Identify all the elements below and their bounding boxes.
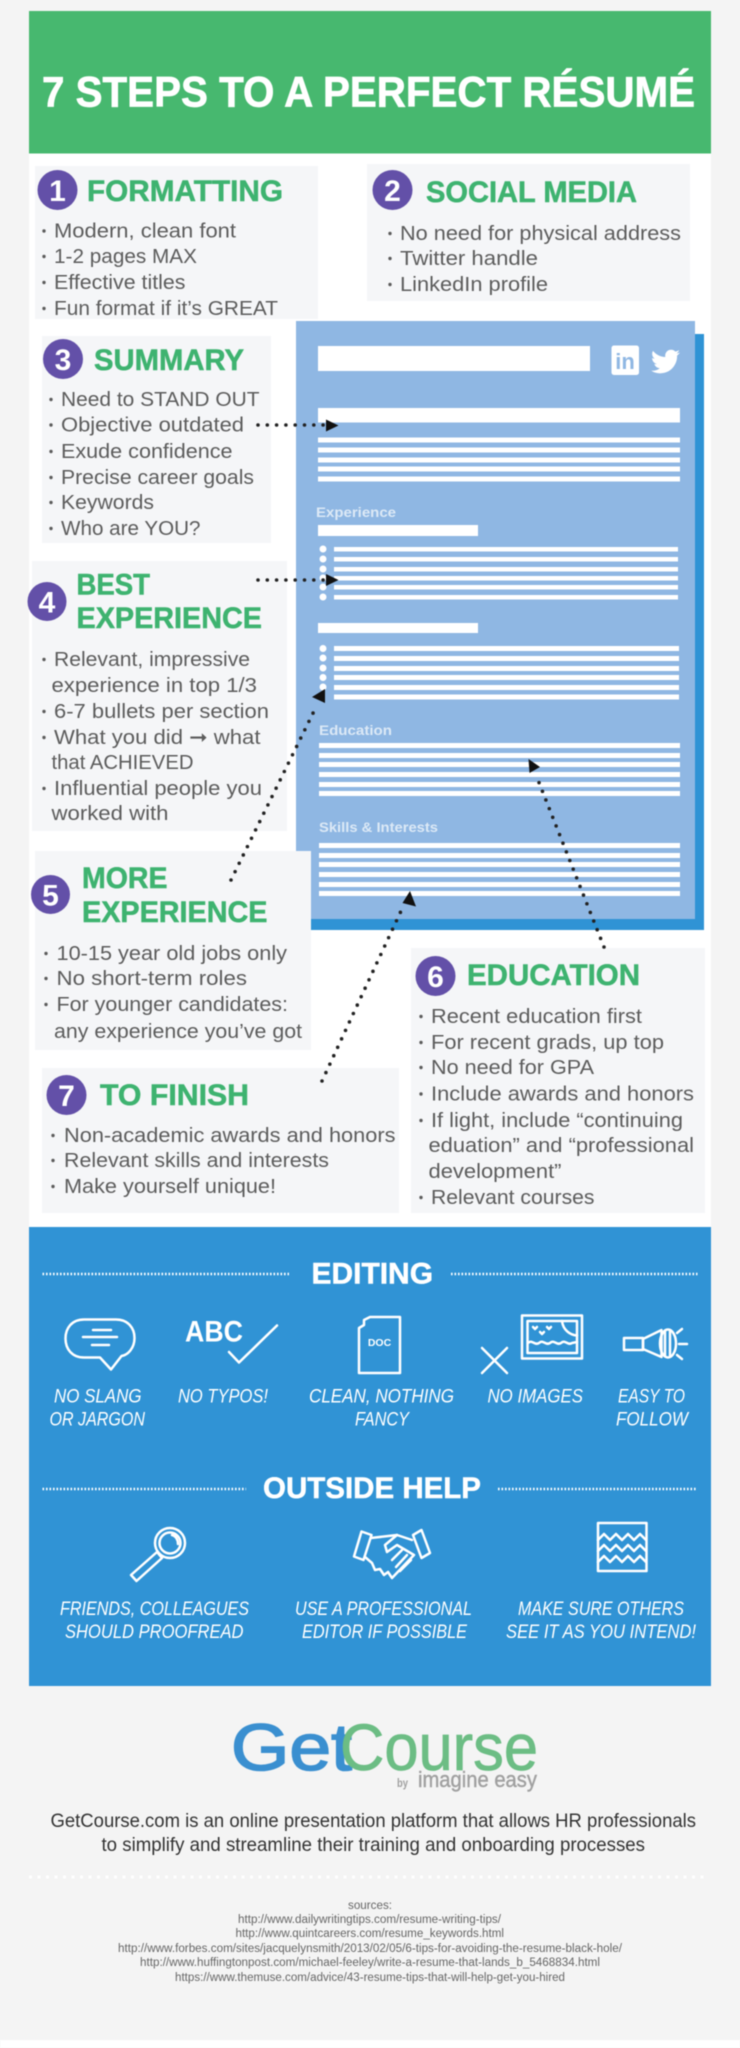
number badge 6 (416, 956, 456, 996)
caption: make sure others: SEE IT AS YOU INTEND! (506, 1621, 696, 1643)
panel: editing and outside help (29, 1227, 711, 1686)
list: summary: Who are YOU? (61, 517, 200, 540)
heading: editing: EDITING (312, 1258, 433, 1290)
icon: twitter (651, 350, 680, 373)
list: summary: Need to STAND OUT (61, 388, 260, 411)
list: best experience (42, 648, 269, 825)
logo: getcourse (231, 1710, 538, 1792)
list: summary (49, 388, 260, 540)
label: experience: Experience (316, 504, 396, 520)
icon: framed image (522, 1316, 582, 1358)
number badge 7: 7 (58, 1080, 75, 1113)
sources (118, 1900, 623, 1984)
list: education: Relevant courses (431, 1186, 594, 1209)
caption: easy to follow: FOLLOW (616, 1408, 689, 1430)
caption: no typos: NO TYPOS! (178, 1386, 268, 1408)
icon: abc check: ABC (185, 1316, 243, 1348)
list: education: Recent education first (431, 1005, 642, 1028)
resume illustration (296, 321, 704, 930)
caption: easy to follow (616, 1386, 689, 1430)
list: summary: Precise career goals (61, 466, 254, 489)
sources: http://www.huffingtonpost.com/michael-feeley/write-a-resume-that-lands_b_5468834.html (140, 1957, 600, 1969)
icon: doc file (359, 1317, 400, 1373)
panel: 2 social media (367, 164, 690, 301)
panel: 3 summary (42, 336, 271, 543)
description text (50, 1810, 696, 1856)
arrow: more experience to resume (231, 689, 325, 880)
number badge 3: 3 (55, 344, 71, 377)
list: summary: Keywords (61, 491, 154, 514)
list: more experience: No short-term roles (56, 967, 247, 990)
title banner (29, 11, 711, 154)
label: education: Education (319, 722, 392, 738)
heading: best experience: EXPERIENCE (76, 602, 262, 635)
panel: 6 education (411, 948, 705, 1213)
icon: handshake (354, 1530, 430, 1578)
sources: http://www.forbes.com/sites/jacquelynsmith/2013/02/05/6-tips-for-avoiding-the-resume-black-hole/ (118, 1943, 623, 1955)
number badge 1 (38, 170, 78, 210)
number badge 6: 6 (427, 961, 444, 994)
icon: speech bubble (66, 1320, 134, 1370)
number badge 5: 5 (42, 880, 59, 912)
heading: social media: SOCIAL MEDIA (426, 176, 637, 209)
list: to finish: Make yourself unique! (64, 1175, 276, 1198)
caption: clean nothing fancy (309, 1386, 454, 1430)
number badge 3 (43, 339, 83, 379)
list: formatting: Fun format if it’s GREAT (54, 297, 278, 320)
list: summary: Exude confidence (61, 440, 232, 463)
list: social media (388, 222, 681, 296)
sources: http://www.quintcareers.com/resume_keywords.html (236, 1928, 504, 1940)
logo: getcourse: Get (231, 1710, 352, 1784)
list: social media: Twitter handle (400, 247, 538, 270)
list: to finish: Non-academic awards and honors (64, 1124, 396, 1147)
list: best experience: Relevant, impressive (54, 648, 250, 671)
list: education (419, 1005, 694, 1209)
heading: to finish: TO FINISH (100, 1079, 249, 1112)
number badge 5 (31, 875, 70, 914)
caption: professional editor: EDITOR IF POSSIBLE (302, 1621, 468, 1643)
list: to finish: Relevant skills and interests (64, 1149, 329, 1172)
caption: friends colleagues: FRIENDS, COLLEAGUES (60, 1598, 249, 1620)
list: education: No need for GPA (431, 1056, 594, 1079)
heading: outside help: OUTSIDE HELP (263, 1472, 481, 1505)
heading: best experience (76, 568, 262, 635)
caption: easy to follow: EASY TO (618, 1386, 685, 1408)
caption: clean nothing fancy: FANCY (355, 1408, 411, 1430)
caption: make sure others (506, 1598, 696, 1643)
arrow: best experience to resume (258, 574, 338, 586)
icon: zigzag document (598, 1523, 646, 1571)
panel: 7 to finish (42, 1068, 399, 1213)
icon: linkedin (612, 346, 639, 375)
list: education: eduation” and “professional (428, 1134, 694, 1157)
list: formatting: 1-2 pages MAX (54, 245, 197, 268)
caption: clean nothing fancy: CLEAN, NOTHING (309, 1386, 454, 1408)
caption: professional editor (295, 1598, 472, 1643)
list: more experience: 10-15 year old jobs only (56, 942, 288, 965)
list: to finish (51, 1124, 396, 1198)
number badge 4 (28, 582, 66, 621)
title banner: 7 STEPS TO A PERFECT RÉSUMÉ (42, 68, 695, 116)
heading: education: EDUCATION (467, 959, 640, 992)
sources: sources: (348, 1900, 392, 1912)
heading: more experience: MORE (82, 862, 168, 895)
list: best experience: 6-7 bullets per section (54, 700, 269, 723)
sources: https://www.themuse.com/advice/43-resume-tips-that-will-help-get-you-hired (175, 1972, 565, 1984)
caption: no slang: OR JARGON (50, 1408, 146, 1430)
panel: 4 best experience (28, 561, 287, 831)
arrow: to finish to resume (322, 891, 416, 1081)
icon: flashlight (624, 1329, 687, 1359)
number badge 1: 1 (49, 175, 66, 208)
list: best experience: experience in top 1/3 (52, 674, 257, 697)
caption: no images: NO IMAGES (488, 1386, 583, 1408)
list: social media: No need for physical address (400, 222, 681, 245)
heading: best experience: BEST (76, 568, 150, 602)
number badge 2: 2 (384, 175, 401, 208)
heading: summary: SUMMARY (94, 344, 244, 377)
arrow: education to resume (528, 759, 604, 947)
list: more experience: any experience you’ve got (54, 1020, 302, 1043)
list: best experience: What you did ➞ what (54, 726, 261, 749)
panel: 5 more experience (31, 851, 311, 1050)
heading: formatting: FORMATTING (87, 175, 283, 208)
list: more experience (44, 942, 302, 1043)
caption: friends colleagues: SHOULD PROOFREAD (65, 1621, 244, 1643)
list: formatting: Modern, clean font (54, 220, 236, 242)
panel: 1 formatting (35, 166, 318, 320)
list: summary: Objective outdated (61, 414, 244, 436)
heading: more experience (82, 862, 268, 929)
list: best experience: that ACHIEVED (52, 751, 194, 774)
icon: x mark (482, 1348, 507, 1373)
arrow: summary to resume (258, 420, 338, 432)
caption: no slang (50, 1386, 146, 1430)
caption: make sure others: MAKE SURE OTHERS (518, 1598, 684, 1620)
list: best experience: Influential people you (54, 777, 262, 800)
description text: GetCourse.com is an online presentation platform that allows HR professionals (50, 1810, 696, 1832)
logo: getcourse: by (397, 1776, 408, 1790)
list: education: Include awards and honors (431, 1082, 694, 1106)
icon: magnifying glass (131, 1528, 185, 1581)
icon: linkedin: in (615, 349, 635, 374)
heading: more experience: EXPERIENCE (82, 896, 268, 929)
list: best experience: worked with (50, 802, 168, 825)
icon: abc check (185, 1316, 277, 1362)
list: more experience: For younger candidates: (56, 993, 288, 1016)
list: education: For recent grads, up top (431, 1031, 664, 1054)
caption: professional editor: USE A PROFESSIONAL (295, 1598, 472, 1620)
number badge 4: 4 (39, 586, 56, 620)
caption: no slang: NO SLANG (54, 1386, 142, 1408)
list: education: If light, include “continuing (431, 1109, 683, 1132)
list: formatting: Effective titles (54, 271, 186, 294)
number badge 7 (46, 1075, 86, 1115)
icon: doc file: DOC (368, 1337, 392, 1349)
list: education: development” (428, 1160, 562, 1183)
sources: http://www.dailywritingtips.com/resume-writing-tips/ (238, 1914, 502, 1926)
caption: friends colleagues (60, 1598, 249, 1643)
logo: getcourse: Course (340, 1710, 538, 1784)
number badge 2 (372, 170, 412, 210)
list: formatting (42, 220, 278, 320)
logo: getcourse: imagine easy (418, 1767, 537, 1792)
description text: to simplify and streamline their training and onboarding processes (102, 1834, 645, 1856)
list: social media: LinkedIn profile (400, 273, 548, 296)
label: skills and interests: Skills & Interests (319, 819, 438, 835)
